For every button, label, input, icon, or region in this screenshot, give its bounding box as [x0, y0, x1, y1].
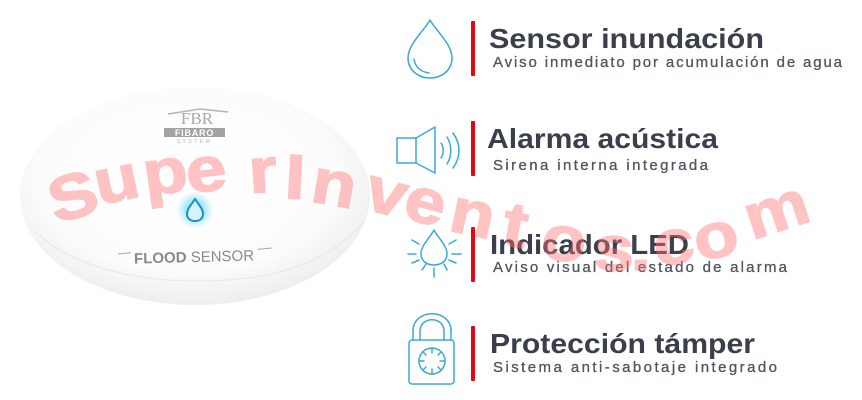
device label: FLOOD SENSOR	[134, 247, 254, 268]
red divider	[471, 21, 475, 76]
watermark: SuperInventos.com: r	[246, 135, 279, 207]
icon: water drop	[408, 20, 452, 78]
watermark: SuperInventos.com	[40, 133, 818, 285]
description: Aviso visual del estado de alarma	[493, 259, 788, 276]
heading: Protección támper	[490, 328, 755, 359]
heading: Sensor inundación	[489, 23, 764, 54]
watermark: SuperInventos.com: I	[283, 142, 307, 213]
red divider	[471, 121, 475, 176]
watermark: SuperInventos.com: v	[358, 154, 416, 232]
watermark: SuperInventos.com: c	[647, 205, 699, 281]
watermark: SuperInventos.com: o	[686, 197, 745, 276]
watermark: SuperInventos.com: s	[592, 213, 636, 285]
brand logo: FIBARO	[175, 128, 214, 138]
watermark: SuperInventos.com: e	[182, 133, 230, 207]
red divider	[471, 227, 475, 282]
red divider	[471, 326, 475, 381]
brand logo: SYSTEM	[177, 139, 212, 145]
description: Sistema anti-sabotaje integrado	[493, 359, 777, 376]
brand logo: FBR	[181, 109, 214, 128]
icon: speaker	[397, 127, 459, 173]
watermark: SuperInventos.com: n	[444, 176, 502, 253]
watermark: SuperInventos.com: o	[539, 203, 590, 276]
watermark: SuperInventos.com: p	[138, 135, 192, 210]
description: Aviso inmediato por acumulación de agua	[493, 54, 843, 71]
brand logo	[164, 109, 228, 145]
feature 3: Indicador LED	[408, 227, 788, 282]
watermark: SuperInventos.com: m	[735, 167, 818, 253]
icon: glowing drop	[408, 230, 461, 277]
feature 4: Protección támper	[409, 314, 777, 384]
description: Sirena interna integrada	[493, 157, 709, 174]
device seam	[36, 222, 364, 281]
watermark: SuperInventos.com: e	[397, 163, 454, 241]
heading: Alarma acústica	[487, 123, 718, 154]
watermark: SuperInventos.com: S	[40, 157, 106, 237]
watermark: SuperInventos.com: n	[307, 146, 362, 222]
feature 1: Sensor inundación	[408, 20, 843, 78]
watermark: SuperInventos.com: t	[498, 189, 533, 262]
feature 2: Alarma acústica	[397, 121, 718, 176]
icon: padlock	[409, 314, 454, 384]
panel: flood sensor device	[20, 87, 370, 305]
heading: Indicador LED	[490, 229, 689, 260]
watermark: SuperInventos.com: u	[87, 141, 145, 219]
watermark: SuperInventos.com: .	[629, 214, 652, 284]
LED water drop	[176, 191, 214, 229]
device body	[20, 87, 370, 305]
